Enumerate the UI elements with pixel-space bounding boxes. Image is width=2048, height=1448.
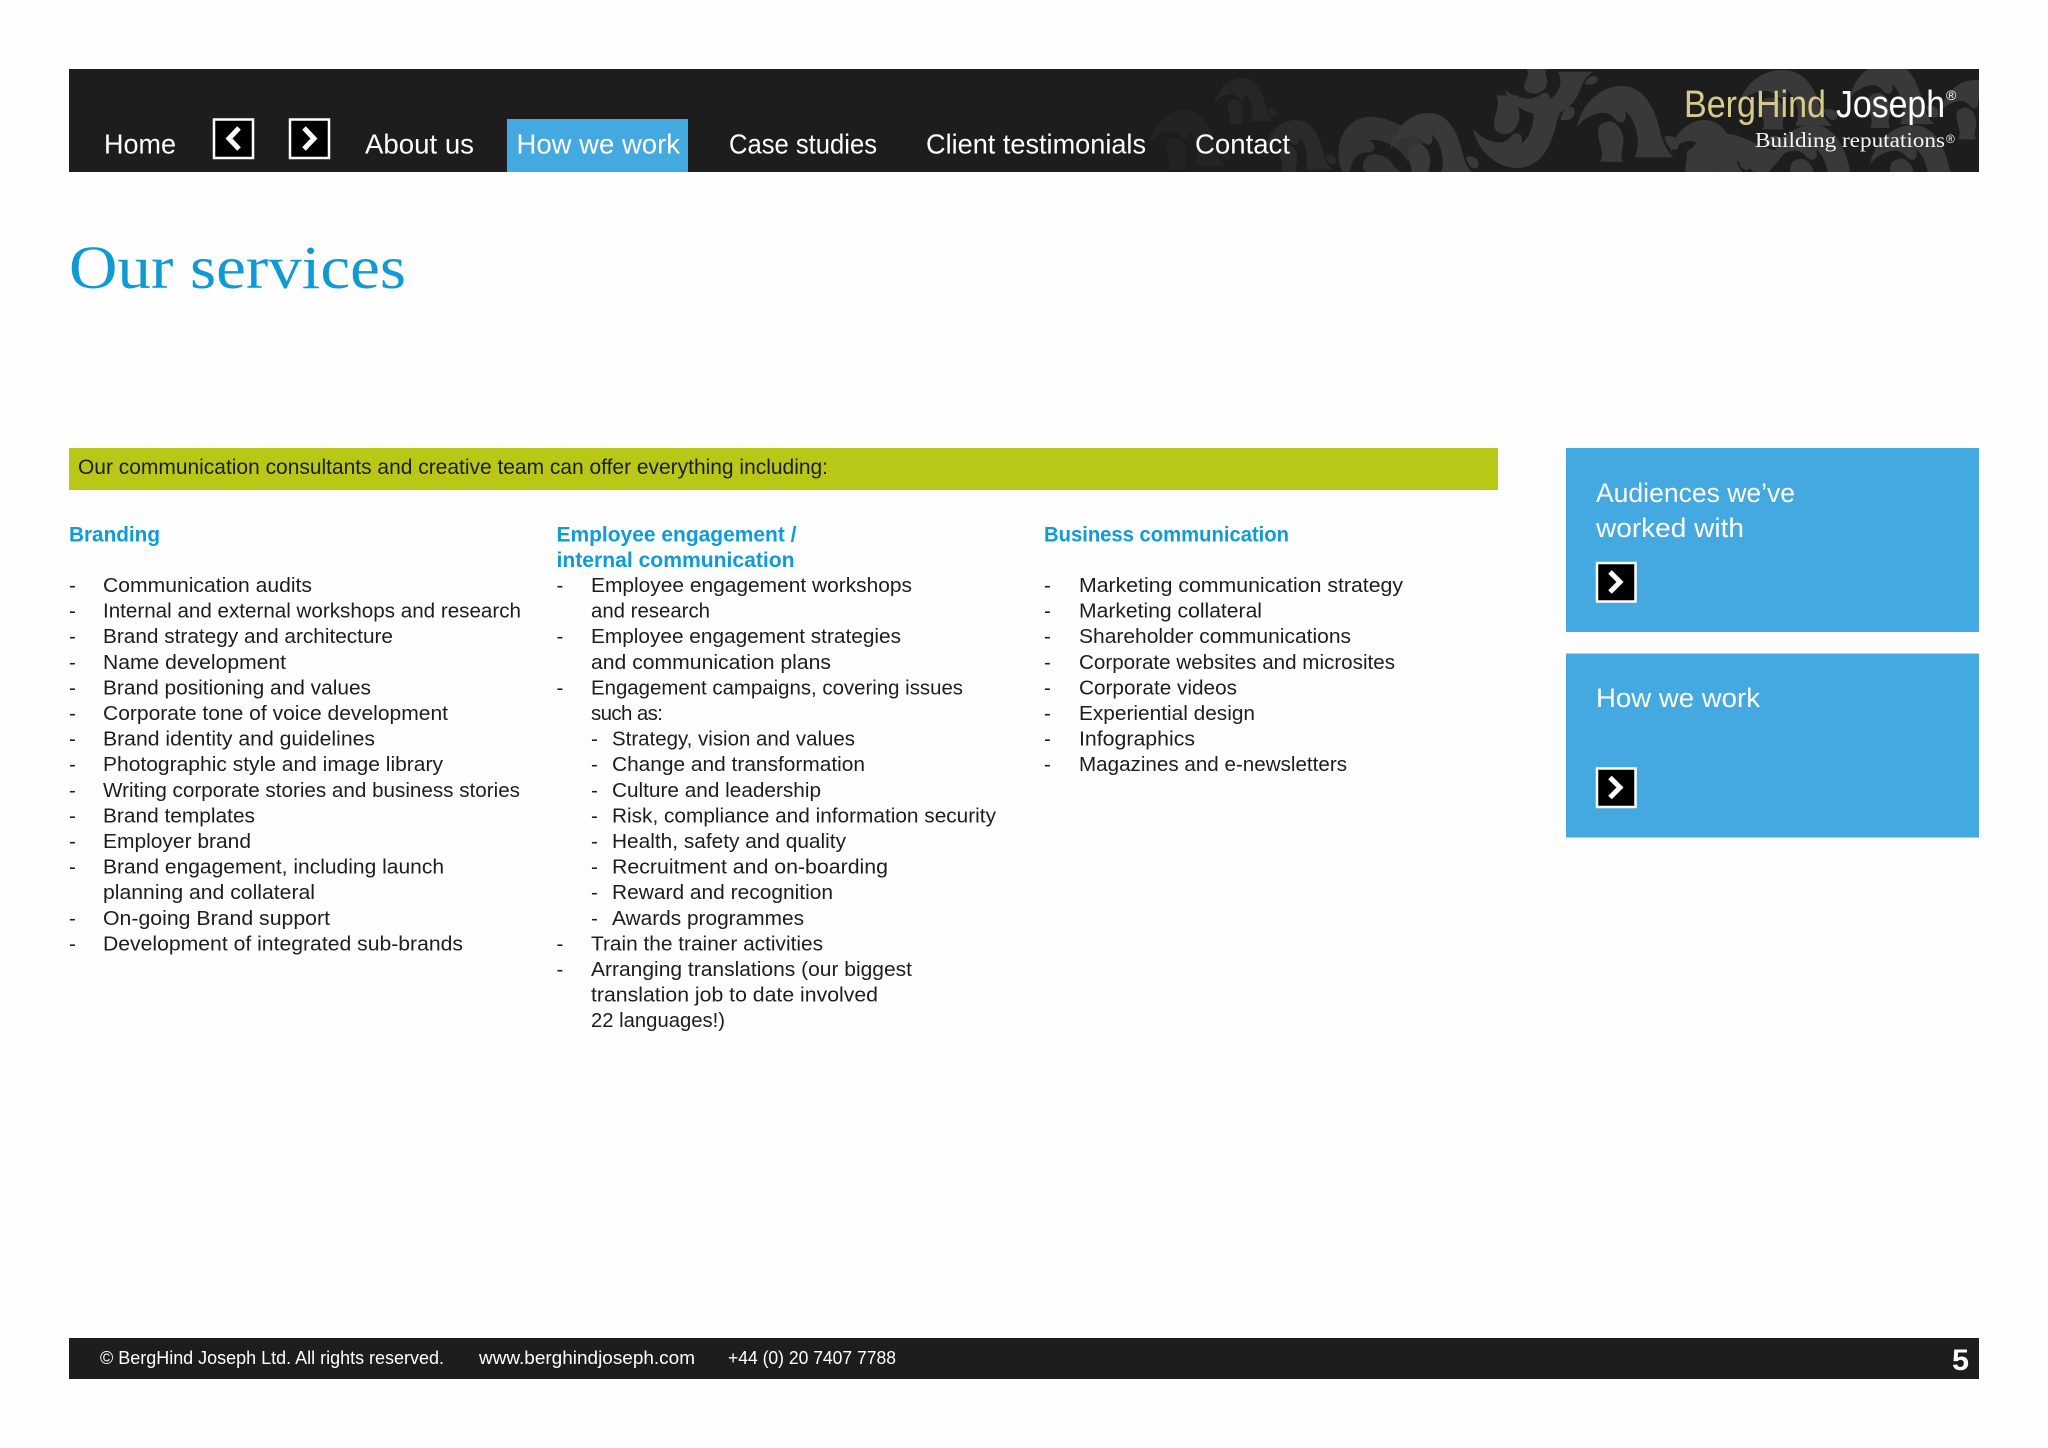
list: Business communication services: - [1044,753,1051,776]
icon: back arrow button [214,120,253,158]
page number: 5 [1952,1344,1969,1377]
column: Branding [69,524,521,955]
list: Business communication services: - [1044,600,1051,623]
list: Business communication services: Corporate websites and microsites [1079,651,1395,674]
footer website: www.berghindjoseph.com [478,1347,695,1368]
logo [1684,84,1957,152]
list: Branding services: - [69,600,76,623]
list: Business communication services: Corporate videos [1079,676,1237,699]
list: Branding services: Brand positioning and values [103,676,371,699]
list: Business communication services: - [1044,728,1051,751]
list: Employee engagement services: Strategy, vision and values [612,728,855,751]
list: Employee engagement services: and research [591,600,710,623]
panel: Audiences we've worked with: worked with [1595,513,1744,543]
list: Employee engagement services: - [591,830,598,853]
list: Branding services: Name development [103,651,286,674]
list: Business communication services: Marketing communication strategy [1079,574,1404,597]
list: Branding services: Brand identity and guidelines [103,728,375,751]
logo: BergHind [1684,84,1826,126]
header bar [69,69,1979,172]
list: Business communication services: Experiential design [1079,702,1255,725]
list: Employee engagement services: - [591,779,598,802]
panel: Audiences we've worked with [1566,448,1979,632]
footer phone: +44 (0) 20 7407 7788 [728,1347,896,1368]
heading: Business communication: Business communication [1044,524,1289,546]
panel: How we work [1566,654,1979,838]
list: Branding services: - [69,702,76,725]
list: Branding services: - [69,779,76,802]
list: Branding services: Internal and external workshops and research [103,600,521,623]
panel: How we work: How we work [1596,683,1761,713]
list: Branding services: - [69,907,76,930]
list: Employee engagement services: Reward and recognition [612,881,833,904]
list: Employee engagement services: - [556,932,563,955]
list: Employee engagement services: and communication plans [591,651,831,674]
heading: Employee engagement / internal communication [556,524,797,572]
list: Business communication services: Infographics [1079,728,1195,751]
list: Branding services: Communication audits [103,574,312,597]
list: Employee engagement services [556,574,997,1032]
list: Branding services [69,574,521,955]
list: Employee engagement services: Employee engagement workshops [591,574,912,597]
list: Branding services: - [69,676,76,699]
list: Branding services: - [69,804,76,827]
list: Branding services: - [69,651,76,674]
list: Employee engagement services: Engagement campaigns, covering issues [591,676,963,699]
list: Branding services: planning and collateral [103,881,315,904]
nav: How we work active tab [507,119,688,172]
list: Employee engagement services: Arranging translations (our biggest [591,958,912,981]
list: Employee engagement services: - [556,958,563,981]
header ornament pattern [1216,69,1979,172]
icon: forward arrow button [290,120,329,158]
panel: Audiences we've worked with: Audiences we’ve [1596,478,1795,508]
list: Branding services: Writing corporate stories and business stories [103,779,520,802]
logo: ® [1946,87,1957,103]
heading: Branding: Branding [69,524,160,546]
list: Employee engagement services: - [556,574,563,597]
list: Employee engagement services: Health, safety and quality [612,830,847,853]
list: Branding services: Photographic style and image library [103,753,444,776]
title: Our services [69,235,406,302]
list: Business communication services: Shareholder communications [1079,625,1351,648]
list: Branding services: Brand strategy and architecture [103,625,393,648]
nav: Home: Home [104,128,176,160]
column: Employee engagement [556,524,997,1032]
footer bar [69,1338,1979,1379]
list: Employee engagement services: such as: [591,702,663,725]
nav: About us: About us [365,128,474,160]
logo: ® [1946,132,1955,146]
list: Employee engagement services: Train the trainer activities [591,932,823,955]
logo: Joseph [1836,84,1945,126]
list: Employee engagement services: - [591,804,598,827]
list: Branding services: - [69,830,76,853]
list: Employee engagement services: Risk, compliance and information security [612,804,997,827]
list: Branding services: Corporate tone of voice development [103,702,448,725]
heading: Employee engagement / internal communication: internal communication [556,549,794,572]
list: Employee engagement services: - [591,728,598,751]
list: Branding services: - [69,753,76,776]
list: Branding services: - [69,574,76,597]
nav: Case studies: Case studies [729,128,877,160]
icon: forward arrow button [1597,768,1636,807]
list: Business communication services: - [1044,651,1051,674]
list: Employee engagement services: - [556,625,563,648]
intro banner: Our communication consultants and creative team can offer everything including: [78,456,828,479]
heading: Employee engagement / internal communication: Employee engagement / [556,524,797,546]
list: Branding services: - [69,932,76,955]
list: Business communication services: Marketing collateral [1079,600,1262,623]
list: Business communication services: - [1044,625,1051,648]
list: Business communication services: Magazines and e-newsletters [1079,753,1347,776]
list: Branding services: Brand templates [103,804,255,827]
intro banner [69,448,1498,490]
list: Employee engagement services: - [591,753,598,776]
list: Branding services: Employer brand [103,830,251,853]
list: Branding services: - [69,625,76,648]
list: Branding services: - [69,856,76,879]
list: Employee engagement services: Employee engagement strategies [591,625,901,648]
list: Branding services: Brand engagement, including launch [103,856,444,879]
list: Branding services: On-going Brand support [103,907,330,930]
nav: Contact: Contact [1195,128,1290,160]
list: Business communication services [1044,574,1404,776]
list: Employee engagement services: translation job to date involved [591,984,878,1007]
nav: Client testimonials: Client testimonials [926,128,1146,160]
column: Business communication [1044,524,1404,776]
list: Employee engagement services: - [556,676,563,699]
footer copyright: © BergHind Joseph Ltd. All rights reserved. [100,1347,444,1368]
list: Employee engagement services: Awards programmes [612,907,804,930]
logo: Building reputations [1755,128,1945,152]
list: Employee engagement services: Recruitment and on-boarding [612,856,888,879]
list: Employee engagement services: - [591,881,598,904]
nav: How we work active tab: How we work [516,128,681,160]
list: Employee engagement services: 22 languages!) [591,1009,725,1032]
list: Employee engagement services: Culture and leadership [612,779,821,802]
icon: forward arrow button [1597,563,1636,602]
list: Branding services: - [69,728,76,751]
list: Employee engagement services: Change and transformation [612,753,865,776]
list: Employee engagement services: - [591,907,598,930]
list: Branding services: Development of integrated sub-brands [103,932,463,955]
list: Business communication services: - [1044,702,1051,725]
list: Business communication services: - [1044,574,1051,597]
list: Employee engagement services: - [591,856,598,879]
list: Business communication services: - [1044,676,1051,699]
